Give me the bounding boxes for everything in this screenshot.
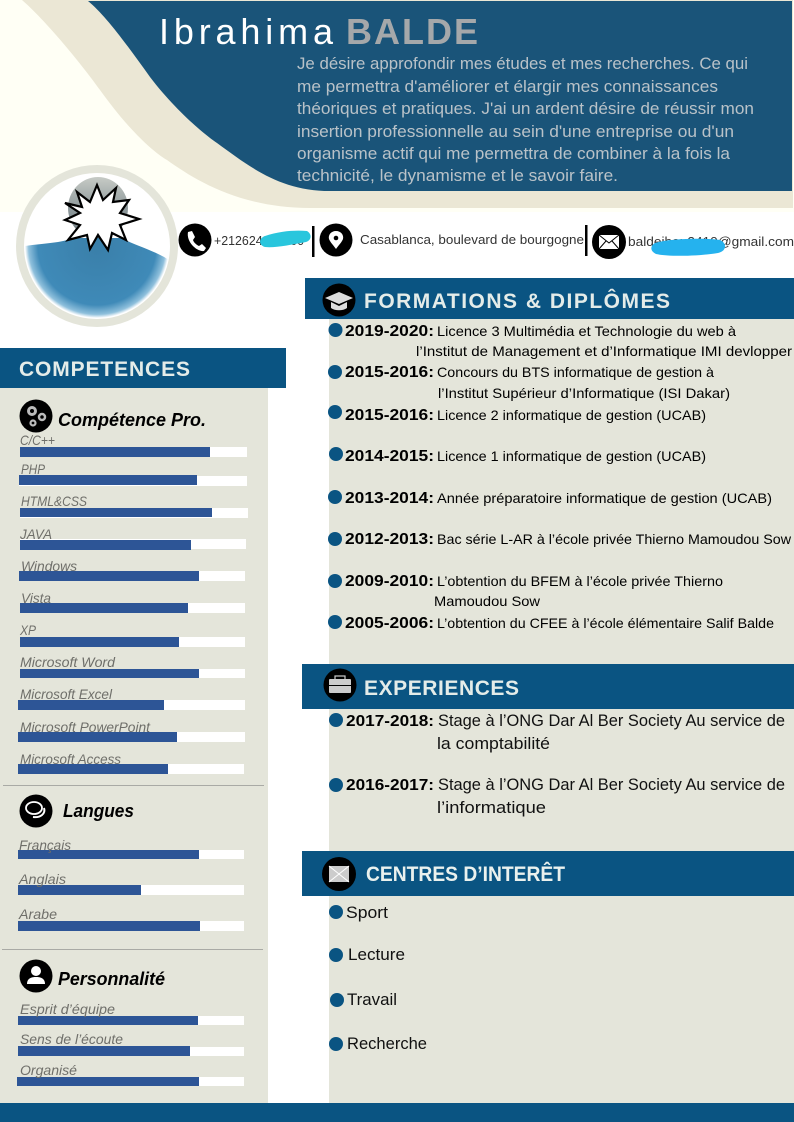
list: formations (328, 323, 792, 632)
contact: email: baldeibou2410@gmail.com (628, 234, 794, 249)
skill bars: langues: Anglais (18, 871, 66, 887)
list: formations: L’obtention du BFEM à l’école privée Thierno (437, 573, 723, 589)
skill bars: langues: Arabe (18, 906, 57, 922)
heading: competence pro (20, 400, 206, 432)
heading: langues: Langues (63, 800, 134, 821)
contact: location (320, 224, 584, 256)
profile photo (16, 165, 178, 327)
divider (585, 225, 588, 256)
objective text block: me permettra d'améliorer et élargir mes connaissances (297, 78, 718, 96)
skill bars: competence pro: JAVA (19, 526, 52, 542)
list: interests: Travail (347, 991, 397, 1009)
list: formations: Bac série L-AR à l’école privée Thierno Mamoudou Sow (437, 531, 792, 547)
list: experiences: 2016-2017: (346, 777, 434, 794)
list: formations: Concours du BTS informatique de gestion à (437, 364, 714, 380)
contact: phone (178, 224, 311, 256)
heading: competence pro: Compétence Pro. (58, 409, 206, 430)
list: experiences: 2017-2018: (346, 713, 434, 730)
list: formations: 2005-2006: (345, 615, 434, 632)
divider (312, 226, 314, 257)
list: experiences: l’informatique (437, 799, 546, 817)
skill bars: competence pro: Microsoft PowerPoint (20, 719, 151, 735)
heading: experiences (302, 664, 794, 709)
skill bars: competence pro: Microsoft Excel (20, 686, 113, 702)
skill bars: personnalite: Sens de l’écoute (20, 1031, 123, 1047)
list: formations: 2013-2014: (345, 490, 434, 507)
title: name: Ibrahima (159, 11, 334, 52)
list: interests: Sport (346, 904, 388, 922)
list: formations: l’Institut de Management et d’Informatique IMI devlopper (416, 343, 792, 359)
footer band (0, 1103, 794, 1122)
objective text block: organisme actif qui me permettra de combiner à la fois la (297, 145, 731, 163)
skill bars: competence pro: XP (19, 622, 37, 638)
list: formations: l’Institut Supérieur d’Informatique (ISI Dakar) (438, 385, 730, 401)
list: formations: Licence 1 informatique de gestion (UCAB) (437, 448, 706, 464)
objective text block (297, 55, 754, 185)
heading: competences (0, 348, 286, 388)
list: interests: Lecture (348, 946, 405, 964)
heading: personnalite (20, 960, 165, 992)
title: name: BALDE (346, 11, 478, 52)
objective text block: insertion professionnelle au sein d'une entreprise ou d'un (297, 123, 734, 141)
skill bars: competence pro: C/C++ (20, 432, 55, 448)
list: experiences (329, 712, 785, 817)
skill bars: competence pro: Vista (21, 590, 51, 606)
skill bars: competence pro: Windows (21, 558, 77, 574)
title: name (159, 11, 478, 52)
list: formations: Année préparatoire informatique de gestion (UCAB) (437, 490, 772, 506)
heading: formations et diplomes: FORMATIONS & DIPLÔMES (364, 289, 670, 313)
skill bars: competence pro (18, 432, 248, 774)
heading: centres d'interet (302, 851, 794, 896)
panel: right column background (329, 319, 794, 1103)
contact: phone: +212624000000 (214, 233, 304, 248)
list: formations: Licence 2 informatique de gestion (UCAB) (437, 407, 706, 423)
list: formations: 2009-2010: (345, 573, 434, 590)
skill bars: competence pro: Microsoft Word (20, 654, 116, 670)
list: formations: L’obtention du CFEE à l’école élémentaire Salif Balde (437, 615, 774, 631)
skill bars: langues (18, 837, 244, 931)
list: interests: Recherche (347, 1035, 427, 1053)
list: interests (329, 904, 427, 1053)
list: formations: Mamoudou Sow (434, 593, 541, 609)
header background (0, 0, 794, 212)
list: formations: 2014-2015: (345, 448, 434, 465)
skill bars: competence pro: PHP (21, 461, 46, 477)
objective text block: théoriques et pratiques. J'ai un ardent désire de réussir mon (297, 100, 754, 118)
skill bars: personnalite: Esprit d’équipe (20, 1001, 115, 1017)
heading: experiences: EXPERIENCES (364, 677, 519, 700)
list: experiences: Stage à l’ONG Dar Al Ber Society Au service de (438, 712, 785, 730)
heading: personnalite: Personnalité (58, 968, 165, 989)
panel: left column background (0, 388, 268, 1103)
list: formations: 2015-2016: (345, 407, 434, 424)
contact: location: Casablanca, boulevard de bourgogne (360, 232, 584, 247)
list: formations: 2012-2013: (345, 531, 434, 548)
heading: centres d'interet: CENTRES D’INTERÊT (366, 862, 565, 886)
objective text block: Je désire approfondir mes études et mes recherches. Ce qui (297, 55, 748, 73)
skill bars: personnalite (17, 1001, 244, 1086)
heading: formations et diplomes (305, 278, 794, 319)
contact: email (592, 225, 794, 259)
list: formations: 2015-2016: (345, 364, 434, 381)
skill bars: langues: Français (19, 837, 71, 853)
list: experiences: Stage à l’ONG Dar Al Ber Society Au service de (438, 776, 785, 794)
heading: competences: COMPETENCES (19, 358, 190, 381)
heading: langues (20, 794, 134, 828)
objective text block: technicité, le dynamisme et le savoir faire. (297, 167, 618, 185)
skill bars: personnalite: Organisé (20, 1062, 77, 1078)
list: formations: 2019-2020: (345, 323, 434, 340)
list: formations: Licence 3 Multimédia et Technologie du web à (437, 323, 736, 339)
skill bars: competence pro: Microsoft Access (20, 751, 121, 767)
list: experiences: la comptabilité (437, 735, 550, 753)
skill bars: competence pro: HTML&CSS (21, 493, 88, 509)
